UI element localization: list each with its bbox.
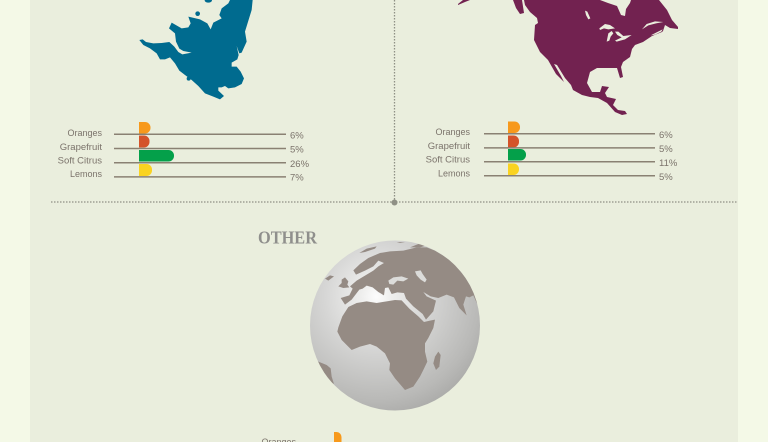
row: Lemons: 7% [290, 172, 304, 184]
chart: North America citrus shares [426, 122, 678, 183]
row: Grapefruit [60, 136, 304, 156]
row: Soft Citrus: 26% [290, 159, 310, 170]
dividers [51, 0, 737, 206]
row: Grapefruit: Grapefruit [428, 141, 470, 152]
row: Oranges: Oranges [435, 127, 470, 137]
row: Oranges: 6% [659, 130, 673, 141]
row: Soft Citrus [426, 149, 678, 169]
chart: blue region citrus shares [58, 122, 310, 184]
row: Grapefruit: 5% [659, 144, 673, 155]
row: Lemons: Lemons [70, 169, 102, 179]
row: Grapefruit: Grapefruit [60, 142, 102, 153]
row: Oranges [435, 122, 673, 141]
map: North America [458, 0, 678, 115]
heading: OTHER: OTHER [258, 227, 317, 247]
row: Lemons: 5% [659, 172, 673, 183]
row: Soft Citrus: 11% [659, 158, 678, 169]
row: Oranges [67, 122, 304, 142]
map: blue region [139, 0, 253, 99]
row: Soft Citrus: Soft Citrus [426, 154, 470, 166]
row: Lemons [70, 164, 304, 184]
globe [310, 240, 483, 410]
row: Oranges: 6% [290, 130, 304, 142]
row: Oranges: Oranges [67, 128, 102, 138]
row: Grapefruit [428, 136, 673, 155]
row: Grapefruit: 5% [290, 144, 304, 156]
row: Soft Citrus [58, 150, 310, 170]
row: Lemons: Lemons [438, 168, 470, 178]
chart: other citrus shares (cropped) [261, 432, 342, 442]
row: Lemons [438, 164, 673, 183]
row: Soft Citrus: Soft Citrus [58, 156, 102, 166]
